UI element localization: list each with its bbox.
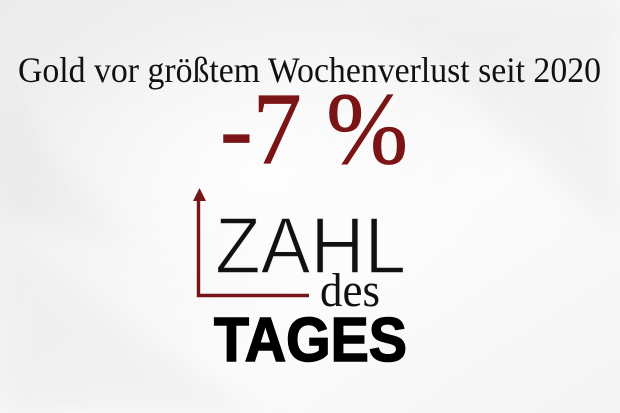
- logo word: ZAHL: ZAHL: [215, 201, 406, 290]
- logo: Zahl des Tages: [193, 188, 407, 375]
- logo word: TAGES: TAGES: [214, 306, 407, 375]
- icon: red axis arrow: [193, 188, 309, 296]
- logo word: des: des: [320, 264, 380, 317]
- key figure: -7 %: [220, 72, 408, 186]
